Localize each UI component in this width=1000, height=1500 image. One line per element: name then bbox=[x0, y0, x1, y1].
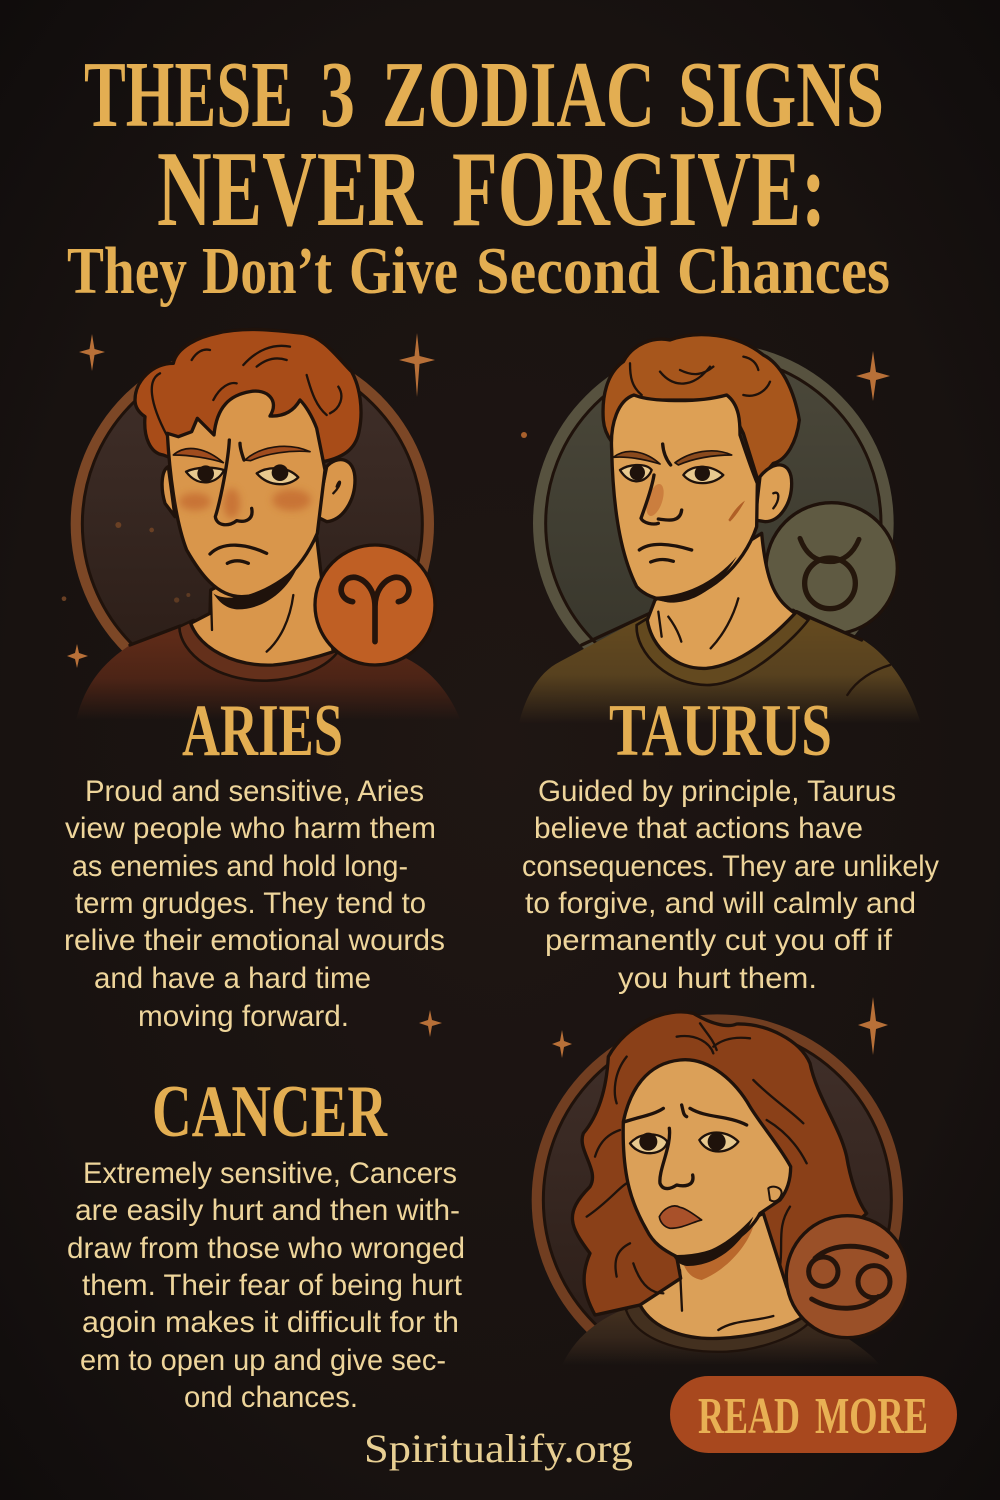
Cancer hair strands bbox=[587, 1023, 807, 1293]
title: ZODIAC bbox=[382, 43, 655, 147]
text block: Cancer: them. Their fear of being hurt bbox=[82, 1269, 463, 1302]
Aries face bbox=[167, 391, 325, 597]
text block: Aries: moving forward. bbox=[138, 1000, 349, 1033]
Taurus neck bbox=[647, 533, 795, 668]
title: They bbox=[67, 234, 187, 308]
title: Chances bbox=[677, 234, 890, 308]
Taurus nose and mouth bbox=[639, 444, 692, 562]
Aries hair strands bbox=[152, 346, 341, 435]
Cancer neck shadow bbox=[683, 1227, 753, 1280]
text block: Cancer: ond chances. bbox=[184, 1381, 358, 1414]
text block: Cancer bbox=[67, 1157, 465, 1414]
text block: Aries: term grudges. They tend to bbox=[75, 887, 426, 920]
portrait: Aries man bbox=[62, 329, 465, 733]
Aries jaw shadow bbox=[213, 565, 298, 609]
Aries neck lines bbox=[211, 482, 340, 652]
Cancer circle backdrop bbox=[532, 1014, 903, 1332]
Aries neck bbox=[191, 537, 333, 665]
icon: Cancer badge bbox=[786, 1216, 908, 1338]
title: Second bbox=[476, 234, 660, 308]
text block: Cancer: em to open up and give sec- bbox=[80, 1344, 446, 1377]
heading: Aries: ARIES bbox=[182, 690, 343, 772]
portrait: Taurus man bbox=[517, 335, 923, 733]
title: 3 bbox=[320, 43, 355, 147]
Cancer shirt bbox=[560, 1300, 883, 1370]
text block: Taurus bbox=[522, 775, 939, 995]
Cancer face bbox=[623, 1060, 791, 1257]
text block: Cancer: agoin makes it difficult for th bbox=[82, 1306, 459, 1339]
Taurus scar and nose shade bbox=[643, 482, 745, 522]
portrait: Cancer woman bbox=[532, 1012, 908, 1386]
Cancer ear bbox=[768, 1187, 782, 1201]
text block: Aries: as enemies and hold long- bbox=[72, 850, 408, 883]
Taurus brows bbox=[613, 451, 732, 465]
Aries circle backdrop bbox=[62, 361, 434, 650]
Taurus face bbox=[611, 395, 757, 601]
text block: Taurus: to forgive, and will calmly and bbox=[525, 887, 916, 920]
decorative stars bbox=[67, 333, 890, 1058]
text block: Cancer: are easily hurt and then with- bbox=[75, 1194, 460, 1227]
Aries ear bbox=[162, 460, 355, 522]
icon: Taurus badge bbox=[766, 503, 897, 634]
Cancer brows bbox=[625, 1105, 747, 1125]
text block: Taurus: believe that actions have bbox=[534, 812, 863, 845]
Cancer jaw shadow bbox=[673, 1217, 753, 1266]
Aries hair bbox=[135, 329, 361, 470]
Taurus hair strands bbox=[630, 357, 770, 396]
text block: Aries: Proud and sensitive, Aries bbox=[85, 775, 424, 808]
title: FORGIVE: bbox=[452, 130, 826, 249]
Taurus hair bbox=[603, 335, 799, 482]
text block: Cancer: draw from those who wronged bbox=[67, 1232, 465, 1265]
button: read more: MORE bbox=[815, 1388, 928, 1445]
text block: Taurus: consequences. They are unlikely bbox=[522, 850, 939, 883]
text block: Aries: and have a hard time bbox=[94, 962, 371, 995]
text block: Cancer: Extremely sensitive, Cancers bbox=[83, 1157, 457, 1190]
text block: Aries: view people who harm them bbox=[65, 812, 436, 845]
title: NEVER bbox=[157, 130, 423, 249]
Taurus eyes bbox=[620, 465, 723, 483]
text block: Taurus: permanently cut you off if bbox=[545, 924, 893, 957]
Aries nose and mouth bbox=[210, 440, 267, 563]
text block: Aries: relive their emotional wourds bbox=[64, 924, 445, 957]
heading: Taurus: TAURUS bbox=[609, 690, 832, 772]
Taurus circle backdrop bbox=[533, 348, 894, 649]
Taurus jaw shadow bbox=[653, 557, 737, 603]
footer: site name: Spiritualify.org bbox=[364, 1426, 633, 1471]
Aries blush and nose bbox=[179, 488, 311, 518]
title bbox=[67, 43, 890, 308]
Taurus neck lines bbox=[658, 493, 778, 648]
Taurus shirt bbox=[517, 610, 923, 733]
title: SIGNS bbox=[678, 43, 884, 147]
icon: Aries badge bbox=[315, 545, 435, 665]
text block: Aries bbox=[64, 775, 445, 1033]
Cancer hair bbox=[572, 1012, 867, 1315]
Aries brows bbox=[173, 446, 310, 463]
title: THESE bbox=[84, 43, 293, 147]
button: read more: READ bbox=[698, 1388, 800, 1445]
Cancer neck lines bbox=[680, 1270, 773, 1330]
Cancer nose bbox=[660, 1128, 693, 1189]
Cancer lips bbox=[659, 1206, 702, 1228]
text block: Taurus: you hurt them. bbox=[618, 962, 817, 995]
text block: Taurus: Guided by principle, Taurus bbox=[538, 775, 896, 808]
button: read more bbox=[670, 1376, 957, 1453]
Cancer neck bbox=[640, 1213, 803, 1339]
Aries shirt bbox=[73, 620, 465, 733]
Taurus ear bbox=[755, 465, 792, 522]
Aries eyes bbox=[186, 464, 298, 484]
heading: Cancer: CANCER bbox=[152, 1071, 388, 1153]
title: Don’t bbox=[202, 234, 333, 308]
title: Give bbox=[349, 234, 458, 308]
Cancer eyes bbox=[630, 1133, 738, 1153]
